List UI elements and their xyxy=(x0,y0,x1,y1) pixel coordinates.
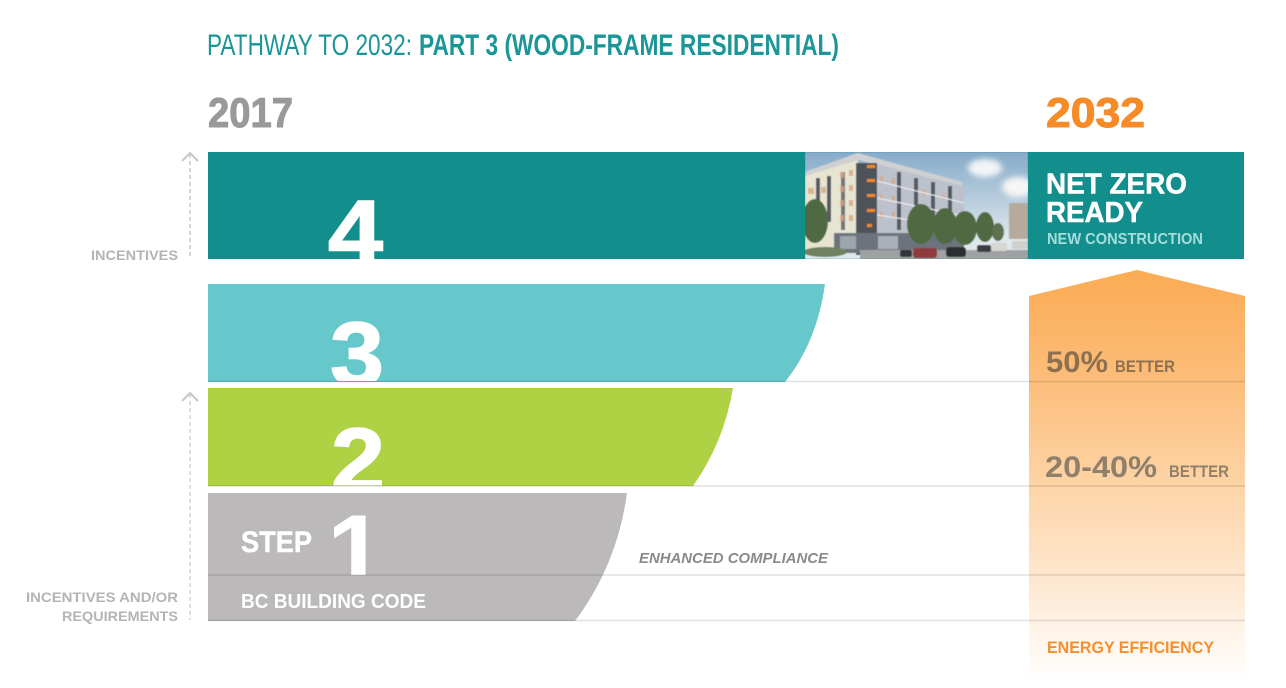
step number 3: 3 xyxy=(330,305,384,405)
50% better xyxy=(1046,346,1175,379)
incentives and/or requirements label: REQUIREMENTS xyxy=(62,608,178,624)
energy efficiency label: ENERGY EFFICIENCY xyxy=(1047,639,1214,657)
photo: wood-frame building xyxy=(802,152,1034,259)
title: PATHWAY TO 2032: xyxy=(207,29,412,62)
panel: step 4 net zero ready xyxy=(208,152,1244,259)
grey band xyxy=(208,493,627,621)
title xyxy=(207,29,839,62)
net zero ready heading: NET ZERO xyxy=(1046,168,1187,200)
incentives and/or requirements label: INCENTIVES AND/OR xyxy=(26,589,178,605)
green band xyxy=(208,388,733,486)
teal band xyxy=(208,152,1244,259)
turquoise band xyxy=(208,284,825,382)
panel: step 1 xyxy=(208,493,627,621)
panel: energy efficiency arrow xyxy=(1029,270,1245,682)
panel: step 2 xyxy=(208,388,733,486)
50% better: 50% xyxy=(1046,346,1108,379)
incentives and/or requirements label xyxy=(26,589,178,624)
enhanced compliance label: ENHANCED COMPLIANCE xyxy=(639,550,829,567)
20-40% better xyxy=(1045,451,1229,484)
step label: STEP xyxy=(241,526,312,559)
incentives label: INCENTIVES xyxy=(91,247,178,263)
step number 1: 1 xyxy=(327,494,385,610)
new construction label: NEW CONSTRUCTION xyxy=(1047,231,1203,248)
start year 2017: 2017 xyxy=(208,89,293,136)
20-40% better: 20-40% xyxy=(1045,451,1157,484)
50% better: BETTER xyxy=(1115,357,1175,376)
panel: step 3 xyxy=(208,284,825,382)
20-40% better: BETTER xyxy=(1169,462,1229,481)
orange gradient arrow xyxy=(1029,270,1245,682)
net zero ready heading: READY xyxy=(1046,197,1143,229)
net zero ready heading xyxy=(1046,168,1187,229)
title: PART 3 (WOOD-FRAME RESIDENTIAL) xyxy=(419,29,839,62)
end year 2032: 2032 xyxy=(1046,89,1145,136)
arrow: incentives xyxy=(182,153,198,259)
step number 4: 4 xyxy=(328,183,383,283)
step number 2: 2 xyxy=(331,411,385,511)
arrow: incentives and/or requirements xyxy=(182,393,198,620)
bc building code label: BC BUILDING CODE xyxy=(241,591,426,613)
